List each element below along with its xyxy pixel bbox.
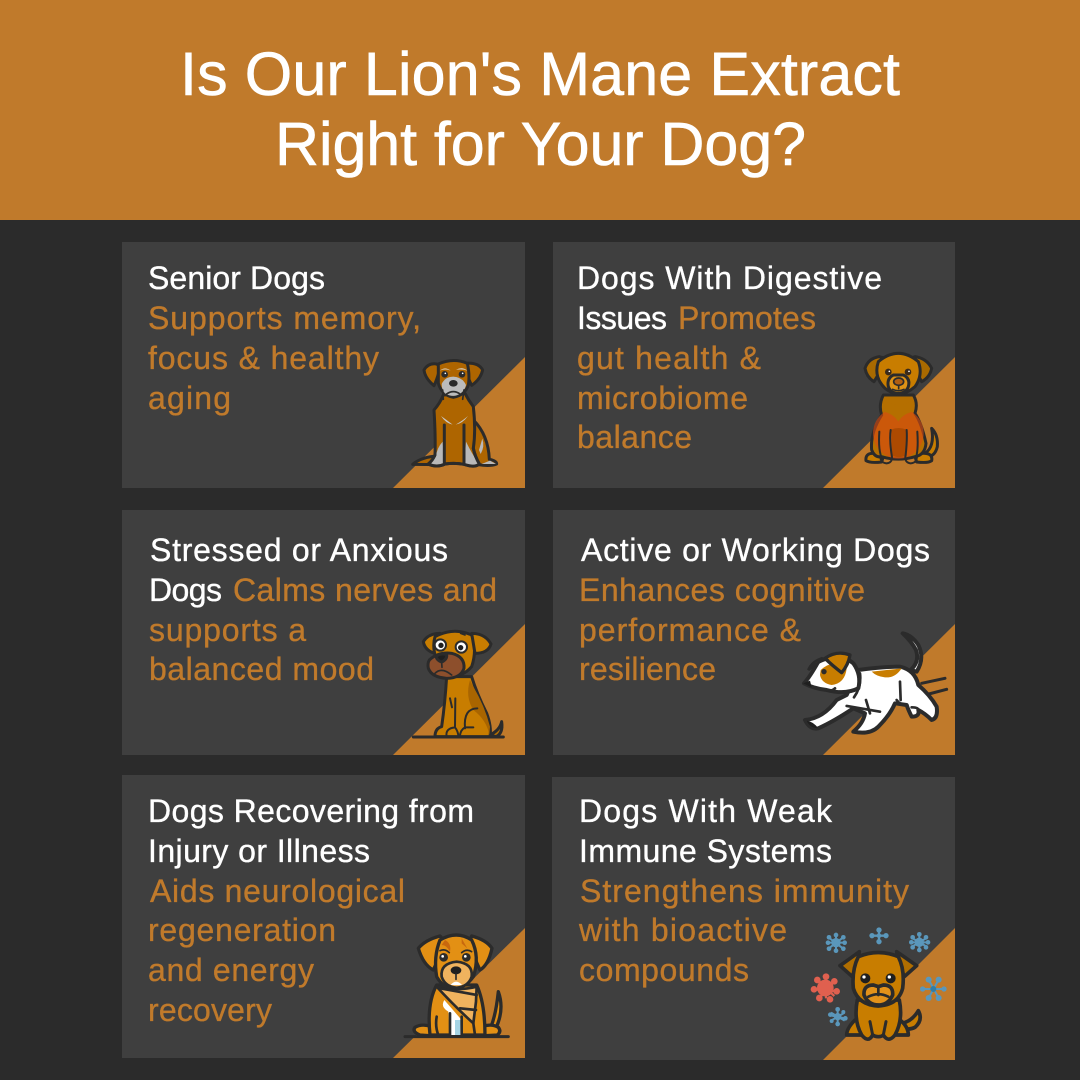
icon: injured dog with bandage [405,935,508,1037]
title [180,40,900,178]
text: digestive issues [577,260,882,455]
icon: red germ [811,973,840,1003]
text: weak immune systems: Dogs With Weak [579,793,833,829]
text: recovering dogs: regeneration [148,912,336,948]
dog body [840,952,920,1039]
text: weak immune systems: compounds [579,952,749,988]
text: recovering dogs [148,793,474,1028]
text: stressed or anxious dogs: supports a [149,612,306,648]
text: weak immune systems: Strengthens immunity [580,873,909,909]
panel: digestive issues [553,242,955,488]
text: recovering dogs: Dogs Recovering from [148,793,474,829]
text: stressed or anxious dogs: balanced mood [149,651,374,687]
icon: blue germ top [869,927,889,944]
icon: blue germ top right [909,932,930,952]
text: digestive issues: Promotes [678,300,816,336]
icon: dog surrounded by germs [811,927,947,1039]
text: recovering dogs: recovery [148,992,272,1028]
text: active or working dogs: performance & [579,612,801,648]
text: senior dogs [148,260,421,416]
text: weak immune systems: with bioactive [578,912,787,948]
text: stressed or anxious dogs: Dogs [149,572,222,608]
text: digestive issues: gut health & [577,340,761,376]
title: Right for Your Dog? [275,110,806,178]
text: senior dogs: aging [148,380,231,416]
text: stressed or anxious dogs [149,532,497,687]
icon: blue germ bottom [828,1007,848,1026]
text: active or working dogs: Enhances cognitive [579,572,865,608]
text: recovering dogs: and energy [148,952,314,988]
icon: blue germ top left [826,933,847,953]
text: digestive issues: balance [577,419,692,455]
icon: running dog [803,633,947,733]
text: senior dogs: Supports memory, [148,300,421,336]
text: weak immune systems: Immune Systems [579,833,832,869]
text: digestive issues: microbiome [577,380,748,416]
icon: senior dog [413,360,497,466]
text: recovering dogs: Injury or Illness [148,833,370,869]
header banner [0,0,1080,220]
text: stressed or anxious dogs: Calms nerves and [233,572,497,608]
panel: stressed or anxious dogs [122,510,525,755]
text: senior dogs: Senior Dogs [148,260,325,296]
text: recovering dogs: Aids neurological [150,873,405,909]
text: digestive issues: Dogs With Digestive [577,260,882,296]
text: active or working dogs: resilience [579,651,716,687]
text: active or working dogs [579,532,930,687]
panel: active or working dogs [553,510,955,755]
panel: senior dogs [122,242,525,488]
icon: anxious dog [413,631,503,737]
panel: recovering dogs [122,775,525,1058]
text: digestive issues: Issues [577,300,667,336]
text: senior dogs: focus & healthy [148,340,379,376]
text: weak immune systems [578,793,909,988]
panel: weak immune systems [552,777,955,1060]
text: active or working dogs: Active or Working Dogs [581,532,930,568]
title: Is Our Lion's Mane Extract [180,40,900,108]
text: stressed or anxious dogs: Stressed or Anxious [150,532,448,568]
icon: dog with digestive issues [865,353,937,463]
icon: blue germ right [920,977,947,1001]
